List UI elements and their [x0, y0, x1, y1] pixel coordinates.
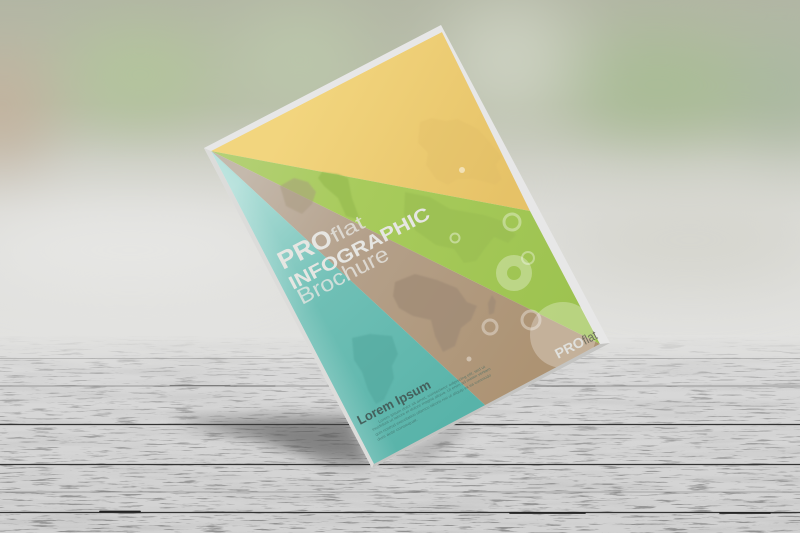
title line: PRO flat: flat [327, 211, 369, 247]
decorative circles [450, 167, 596, 368]
title line: INFOGRAPHIC: INFOGRAPHIC [286, 204, 434, 294]
title [273, 204, 434, 309]
brochure cover artwork [211, 32, 600, 464]
body copy: duis aute consequat. [377, 418, 418, 442]
left edge sheen [216, 161, 390, 464]
title line: PRO flat: PRO [273, 224, 337, 275]
green wedge [211, 151, 600, 344]
dots [459, 167, 465, 173]
wooden table [0, 335, 800, 533]
teal wedge [211, 151, 486, 464]
corner logo [552, 327, 600, 362]
body copy: Lorem ipsum dolor sit amet, consectetur adipiscing elit, sed ut [378, 364, 487, 424]
body copy: incididunt ut labore et dolore magna aliqua. Ut enim ad minim veniam [372, 367, 491, 432]
body copy [372, 364, 492, 442]
brown wedge [211, 151, 600, 406]
corner logo: flat [579, 327, 600, 348]
rings [504, 214, 520, 230]
corner logo: PRO [552, 333, 587, 362]
large donut [502, 260, 526, 286]
blurred background [0, 0, 800, 345]
yellow wedge [211, 32, 530, 211]
Lorem Ipsum heading: Lorem Ipsum [354, 377, 433, 428]
brochure [204, 25, 610, 468]
large corner circle [530, 302, 596, 368]
title line: Brochure: Brochure [293, 241, 393, 309]
body copy: quis nostrud exercitation ullamco laboris nisi ut aliquip ex ea commodo [375, 373, 492, 437]
brochure paper edge [204, 25, 610, 468]
brochure shadow on table [170, 417, 470, 466]
title line: PRO flat [273, 211, 369, 275]
world map silhouette [280, 172, 496, 403]
